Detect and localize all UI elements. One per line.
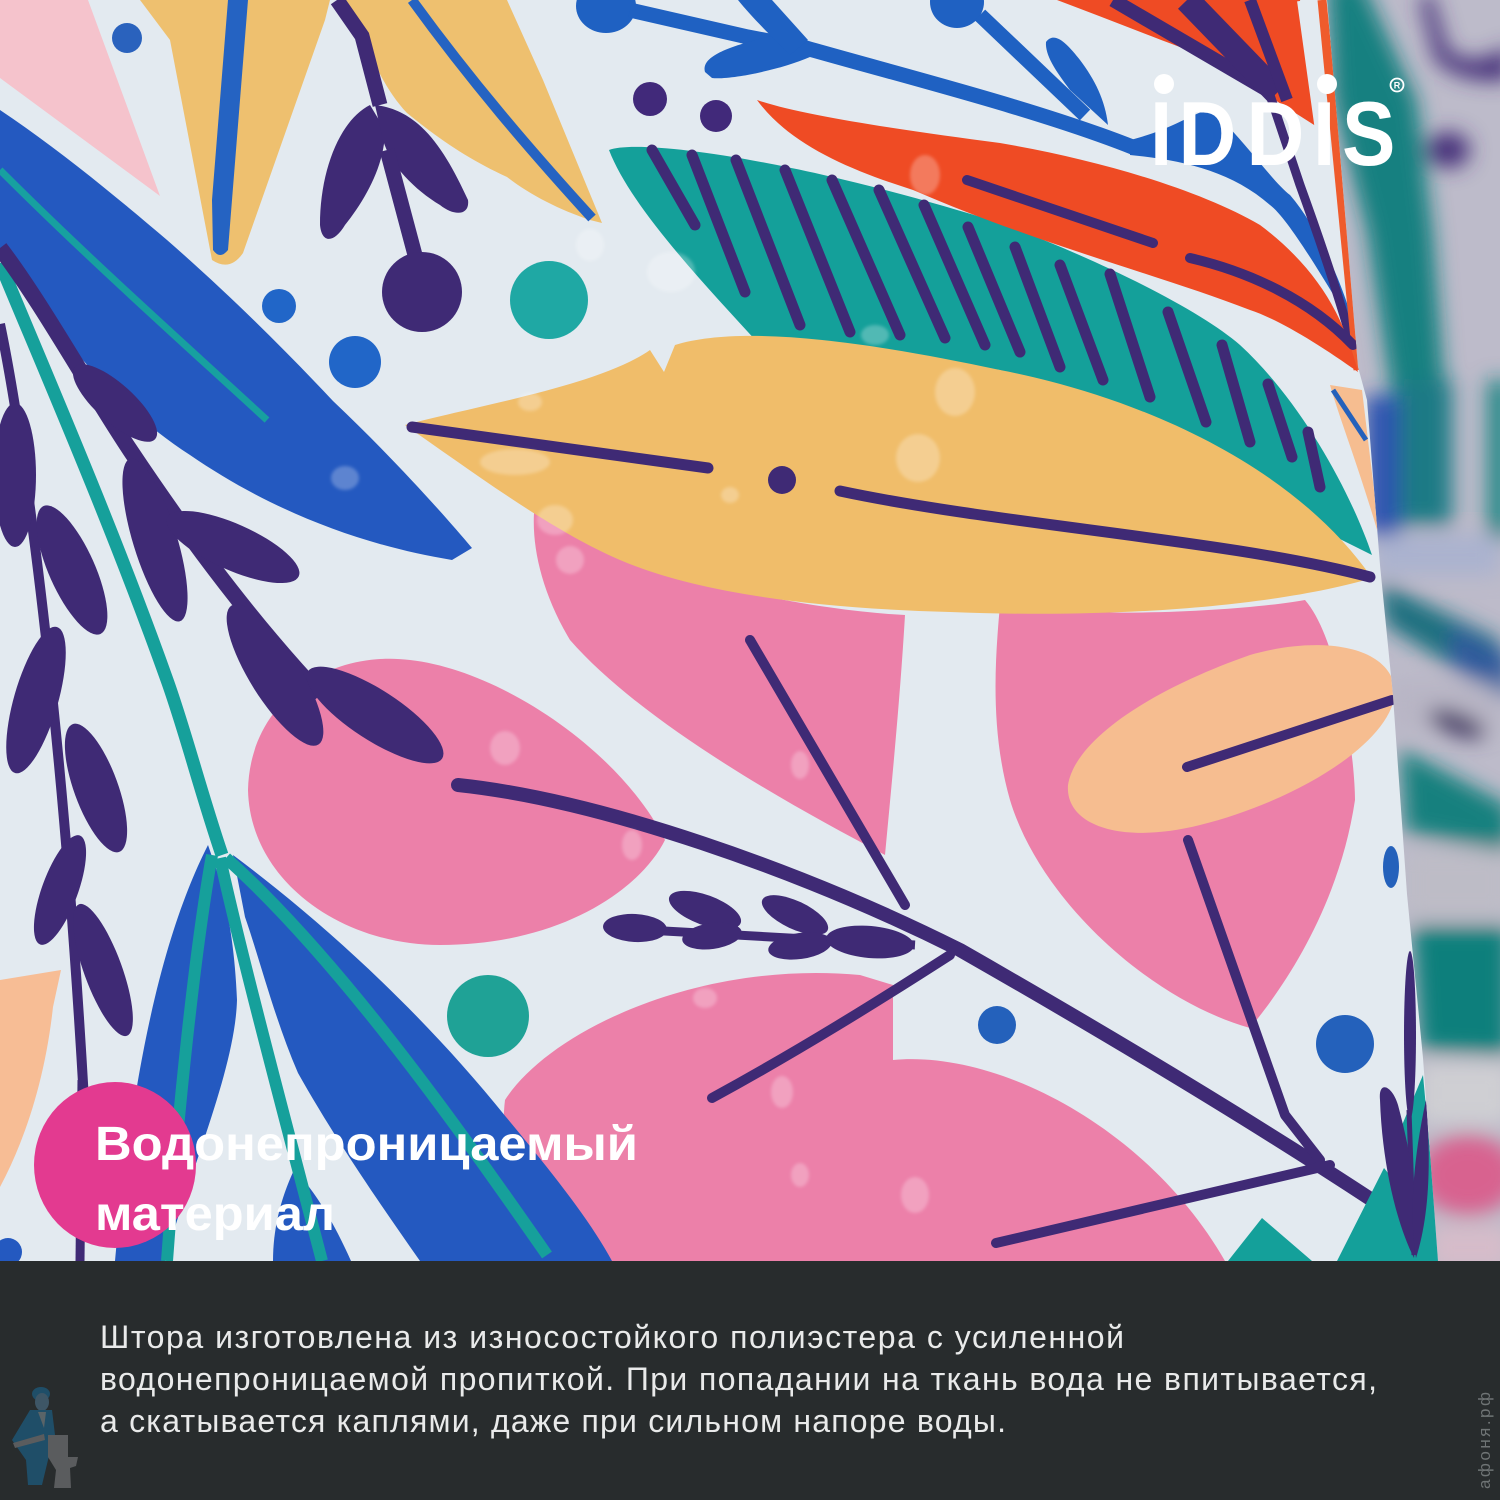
pink triangle top left [0, 0, 160, 196]
pink circle behind heading [34, 1082, 196, 1248]
red and purple foliage top right [1057, 0, 1358, 370]
purple sprig far left [0, 324, 145, 1266]
peach leaf bottom left [0, 970, 61, 1187]
logo: iDDiS: IDDIS [1150, 83, 1395, 185]
blue branches top [576, 0, 1355, 330]
description text: Штора изготовлена из износостойкого полиэстера с усиленной [100, 1319, 1124, 1355]
striped teal leaf [609, 147, 1372, 555]
purple branch bottom right [458, 640, 1372, 1243]
decorative dots [112, 23, 1399, 1073]
peach leaf right edge [1330, 385, 1378, 531]
purple leaves bottom right [1380, 951, 1429, 1258]
blurred background curtain folds [1327, 0, 1500, 1261]
water droplets [331, 155, 975, 1213]
heading [95, 1118, 638, 1241]
red leaf [757, 100, 1358, 372]
pink shapes [248, 503, 1355, 1261]
watermark: афоня.рф [1475, 1392, 1494, 1489]
purple sprig with berry [320, 0, 468, 332]
icon: plumber with toilet [12, 1387, 78, 1488]
big blue leaf [0, 110, 472, 560]
peach leaf [1068, 645, 1395, 833]
dark footer band [0, 1261, 1500, 1500]
teal line [0, 263, 222, 855]
description text: а скатывается каплями, даже при сильном напоре воды. [100, 1403, 1006, 1439]
heading: материал [95, 1188, 335, 1241]
logo: iDDiS: R [1394, 80, 1401, 90]
description text: водонепроницаемой пропиткой. При попадании на ткань вода не впитывается, [100, 1361, 1377, 1397]
purple sprig left [0, 248, 456, 780]
big yellow leaf [405, 336, 1372, 614]
heading: Водонепроницаемый [95, 1118, 638, 1171]
yellow leaves top [140, 0, 602, 265]
teal shapes bottom right [1228, 1075, 1440, 1261]
description text [100, 1319, 1377, 1439]
bottom blue leaves [115, 845, 612, 1261]
